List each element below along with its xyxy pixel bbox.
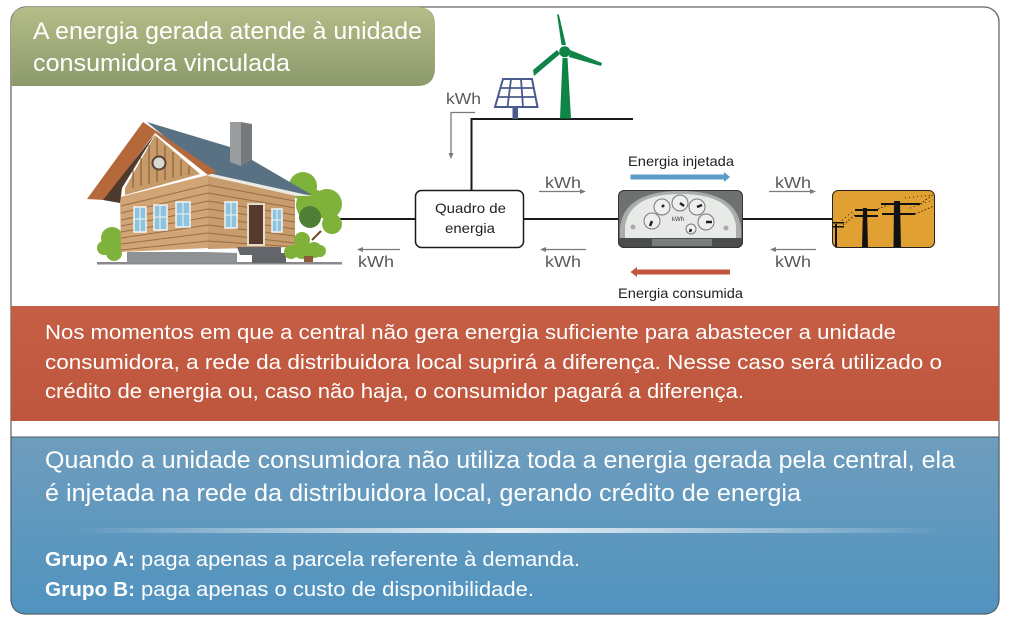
group list: Grupo B: — [45, 578, 135, 601]
label: energia injetada — [628, 153, 734, 182]
kWh label: board to meter top: kWh — [545, 175, 581, 192]
kWh label: board to meter top — [539, 175, 586, 194]
red note text — [45, 321, 942, 403]
icon: electric meter — [618, 190, 743, 248]
blue note heading — [45, 447, 956, 507]
label: energia consumida: Energia consumida — [618, 285, 743, 301]
panel: energy board: Quadro de — [435, 200, 506, 216]
icon: electric meter: kWh — [672, 217, 684, 223]
panel: energy board — [416, 190, 524, 248]
red note text: crédito de energia ou, caso não haja, o consumidor pagará a diferença. — [45, 380, 744, 403]
kWh label: board to meter bottom — [540, 247, 586, 271]
icon: power lines — [832, 190, 935, 248]
group list — [45, 548, 580, 601]
kWh label: meter to grid top: kWh — [775, 175, 811, 192]
red note text: consumidora, a rede da distribuidora local suprirá a diferença. Nesse caso será utilizado o — [45, 351, 942, 374]
group list: Grupo A: — [45, 548, 135, 571]
kWh label: generation: kWh — [446, 91, 481, 108]
kWh label: meter to grid bottom — [770, 247, 816, 271]
group list: paga apenas o custo de disponibilidade. — [141, 578, 534, 601]
blue note heading: Quando a unidade consumidora não utiliza toda a energia gerada pela central, ela — [45, 447, 956, 474]
arrow: injected — [630, 172, 730, 182]
icon: solar panel — [495, 79, 538, 119]
blue note heading: é injetada na rede da distribuidora local, gerando crédito de energia — [45, 480, 802, 507]
wires — [338, 119, 832, 219]
panel: title — [11, 7, 435, 86]
title text — [33, 18, 422, 77]
icon: house — [87, 122, 342, 264]
label: energia injetada: Energia injetada — [628, 153, 734, 169]
panel: red note — [11, 306, 999, 421]
panel: blue note — [11, 437, 999, 614]
kWh label: board to meter bottom: kWh — [545, 254, 581, 271]
kWh label: meter to grid bottom: kWh — [775, 254, 811, 271]
red note text: Nos momentos em que a central não gera energia suficiente para abastecer a unidade — [45, 321, 896, 344]
title text: A energia gerada atende à unidade — [33, 18, 422, 45]
icon: wind turbine — [533, 14, 602, 118]
kWh label: house return: kWh — [358, 254, 394, 271]
kWh label: house return — [357, 247, 400, 271]
title text: consumidora vinculada — [33, 50, 291, 77]
group list: paga apenas a parcela referente à demanda. — [141, 548, 580, 571]
arrow: consumed — [630, 267, 730, 277]
kWh label: generation — [446, 91, 481, 159]
kWh label: meter to grid top — [769, 175, 816, 194]
panel: energy board: energia — [445, 220, 495, 236]
